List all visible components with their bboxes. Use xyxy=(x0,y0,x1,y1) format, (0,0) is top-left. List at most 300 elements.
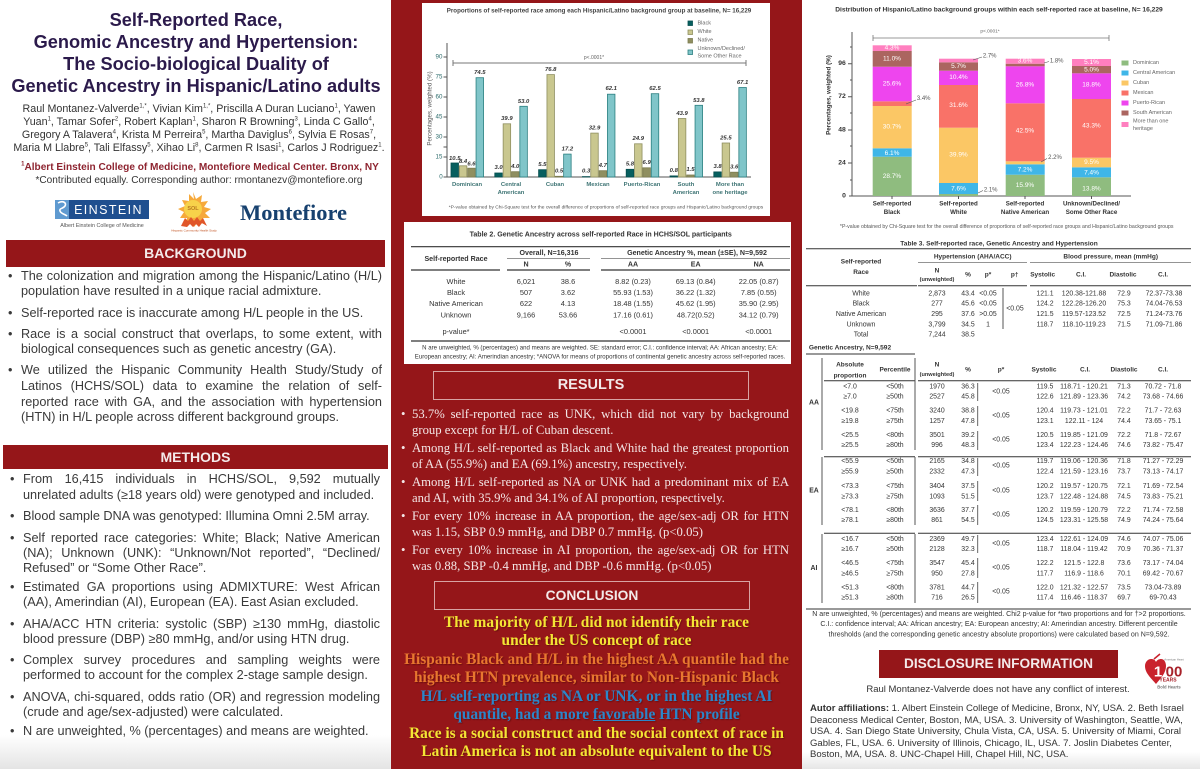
institution: 1Albert Einstein College of Medicine, Montefiore Medical Center. Bronx, NY xyxy=(21,162,379,173)
bullet list: background: reported race with GA, and the association with hypertension xyxy=(21,395,382,409)
logo: SOL sun: SOL xyxy=(187,206,199,212)
disclosure heading xyxy=(879,650,1118,678)
rows: AI: ≥75th xyxy=(886,570,904,578)
legend: Dominican xyxy=(1133,60,1159,66)
bullet list: results: 53.7% self-reported race as UNK, which did not vary by background xyxy=(412,407,789,421)
bullet list: results: was 0.88, SBP -0.4 mmHg, and DBP -0.6 mmHg. (p<0.05) xyxy=(412,559,711,573)
rows: AA: 74.4 xyxy=(1117,418,1131,425)
rows: self-reported race: 75.3 xyxy=(1117,300,1131,308)
logo: American Heart 100 years: YEARS xyxy=(1159,678,1177,684)
rows: EA: 74.9 xyxy=(1117,517,1131,524)
bars: Mexican xyxy=(582,86,617,177)
bars: More than one heritage xyxy=(713,80,748,177)
rows: AI: 73.6 xyxy=(1117,560,1131,567)
author affiliations: Autor affiliations: 1. Albert Einstein College of Medicine, Bronx, NY, USA. 2. Beth Israel xyxy=(810,703,1184,714)
bullet list: methods: Self reported race categories: White; Black; Native American xyxy=(23,531,380,545)
bars: Cuban: 76.8 xyxy=(545,67,557,73)
bars: Dominican: 74.5 xyxy=(474,70,486,76)
row: Black: 507 xyxy=(520,288,532,297)
rows: EA: <0.05 xyxy=(992,488,1010,494)
rows: EA: 3636 xyxy=(929,507,945,514)
bullet list: background: Latinos (HCHS/SOL) data to examine the relation of self- xyxy=(21,379,382,393)
legend: Black xyxy=(698,20,711,26)
row: Black: 36.22 (1.32) xyxy=(676,288,716,297)
table 3 footnote: N are unweighted, % (percentages) and means are weighted. Chi2 p-value for *two proportions and for †>2 proportions. xyxy=(812,611,1186,618)
table 2 header xyxy=(424,249,767,268)
rows: EA: ≥73.3 xyxy=(841,494,859,500)
heading: methods: METHODS xyxy=(160,449,230,465)
rows: AA: 72.2 xyxy=(1117,408,1131,414)
legend: Mexican xyxy=(1133,90,1153,96)
rows: AI: 116.9 - 118.6 xyxy=(1064,570,1104,578)
bars: Cuban: 0.5 xyxy=(555,168,564,174)
legend: heritage xyxy=(1133,126,1153,132)
rows: AI: <46.5 xyxy=(841,560,859,567)
rows: AI: 950 xyxy=(931,570,943,578)
rows: AA: 1257 xyxy=(929,418,945,425)
callouts: 1.8% xyxy=(1050,59,1064,65)
rows: AA: 2527 xyxy=(929,394,945,400)
rows: AI xyxy=(811,536,1183,602)
table 2 header: % xyxy=(565,260,572,268)
chart: self-reported race by background group: p<.0001* xyxy=(584,55,604,61)
rows: EA: 2165 xyxy=(929,458,945,465)
bars: South American: 0.8 xyxy=(670,168,679,174)
rows: self-reported race: 71.09-71.86 xyxy=(1146,322,1183,328)
bullet list: results: • xyxy=(401,441,405,455)
table 3 header: Diastolic xyxy=(1109,272,1137,278)
rows: AI: 44.7 xyxy=(961,584,975,592)
legend xyxy=(688,20,745,60)
table 2 header: Self-reported Race xyxy=(424,255,488,263)
axes xyxy=(848,32,1131,199)
table 2 header: Genetic Ancestry %, mean (±SE), N=9,592 xyxy=(627,249,767,257)
table 3 title: Table 3. Self-reported race, Genetic Ancestry and Hypertension xyxy=(900,240,1098,248)
rows: AI: 117.7 xyxy=(1037,570,1054,578)
rows: EA: 71.27 - 72.29 xyxy=(1143,458,1183,465)
rows: AA: 71.7 - 72.63 xyxy=(1145,408,1182,414)
logo: American Heart 100 years: 00 xyxy=(1166,664,1182,680)
stacked bar: Self-reported Native American xyxy=(1006,58,1045,196)
bars: Cuban: 5.5 xyxy=(538,162,547,168)
rows: EA: 73.13 - 74.17 xyxy=(1143,468,1183,476)
callouts: 3.4% xyxy=(917,96,931,102)
bullet list: results: and AI, with 35.9% and 34.1% of AI proportion, respectively. xyxy=(412,491,725,505)
row: p-value: <0.0001 xyxy=(682,327,709,336)
bars: Mexican: 62.1 xyxy=(605,86,617,92)
rows: EA: 123.7 xyxy=(1036,494,1054,500)
heading: background: BACKGROUND xyxy=(144,245,247,261)
rows: AA: <50th xyxy=(886,384,904,390)
bullet list: methods: • xyxy=(10,653,14,667)
table 3 header: Blood pressure, mean (mmHg) xyxy=(1063,254,1158,260)
rows: self-reported race: 118.7 xyxy=(1037,322,1054,328)
category labels: Self-reported xyxy=(1006,200,1044,208)
bars: South American xyxy=(670,98,705,177)
row: Native American: 35.90 (2.95) xyxy=(739,299,779,308)
bars: Central American: 4.0 xyxy=(510,164,520,170)
bullet list: background: • xyxy=(8,363,12,377)
table 2 footnote: N are unweighted, % (percentages) and means are weighted. SE: standard error; C.I.: confidence interval; AA: African ancestry; EA: xyxy=(422,344,778,352)
rows: self-reported race: 74.04-76.53 xyxy=(1146,300,1183,308)
table 3 xyxy=(806,240,1191,638)
bars: South American: 43.9 xyxy=(675,111,689,117)
rows: AA: ≥19.8 xyxy=(841,418,859,425)
corresponding author: *Contributed equally. Corresponding author: rmontanezv@montefiore.org xyxy=(35,175,363,186)
rows: EA: 37.5 xyxy=(961,483,975,490)
rows: AA: <0.05 xyxy=(992,436,1010,444)
legend: White xyxy=(698,29,712,35)
genetic ancestry header xyxy=(834,362,1168,380)
stacked bar: Self-reported Black: 25.6% xyxy=(883,80,901,88)
authors: Yuan1, Tamar Sofer2, Robert Kaplan1, Sharon R Browning3, Linda C Gallo4, xyxy=(23,116,375,128)
y axis labels: 72 xyxy=(838,93,846,100)
authors: Raul Montanez-Valverde1,*, Vivian Kim1,*, Priscilla A Duran Luciano1, Yawen xyxy=(23,103,375,115)
rows: AI: ≥46.5 xyxy=(841,570,859,578)
stacked bar: Self-reported Black: 30.7% xyxy=(883,124,901,130)
table 3 rules xyxy=(806,249,1191,609)
bars: South American: 1.5 xyxy=(686,167,695,173)
rows: EA: <0.05 xyxy=(992,462,1010,470)
rows: AA: 36.3 xyxy=(961,384,975,390)
title: Self-Reported Race, xyxy=(110,10,282,30)
chart footnote: *P-value obtained by Chi-Square test for the overall difference of proportions of self-reported race groups and Hispanic/Latino background groups xyxy=(449,204,764,210)
table 2 xyxy=(411,232,790,360)
legend: South American xyxy=(1133,110,1172,116)
table 3 header: p† xyxy=(1011,272,1019,278)
rows: AA: 73.68 - 74.66 xyxy=(1143,394,1183,400)
bullet list: results: Among H/L self-reported as Black and White had the greatest proportion xyxy=(412,441,789,455)
legend: Cuban xyxy=(1133,80,1149,86)
bars: More than one heritage: 3.6 xyxy=(730,164,739,170)
bars: More than one heritage: 25.5 xyxy=(719,136,732,142)
heading: results xyxy=(433,371,749,400)
rows: EA: 123.31 - 125.58 xyxy=(1060,517,1108,524)
bullet list: background: • xyxy=(8,327,12,341)
table 3 header: C.I. xyxy=(1158,272,1168,278)
bars: Central American: 39.9 xyxy=(501,116,513,122)
conclusion statement 3 xyxy=(420,688,773,724)
logo: Montefiore: Montefiore xyxy=(240,200,347,225)
table 2 header: N xyxy=(523,260,529,268)
rows: AI: <50th xyxy=(886,536,904,543)
rows: EA: 124.5 xyxy=(1036,517,1054,524)
bullet list: methods: (NA); Unknown (UNK): “Unknown/Not reported”, “Declined/ xyxy=(23,546,380,560)
table 3 header xyxy=(841,254,1168,283)
rows: self-reported race: <0.05 xyxy=(1006,306,1024,312)
rows: EA: 54.5 xyxy=(961,517,975,524)
rows: AI: ≥51.3 xyxy=(841,594,859,602)
conclusion statement 4: Race is a social construct and the social context of race in xyxy=(409,725,784,742)
rows: self-reported race: <0.05 xyxy=(979,290,997,298)
rows: AI: 73.04-73.89 xyxy=(1145,584,1182,592)
rows: self-reported race: 43.4 xyxy=(961,290,975,298)
rows: AA: 45.8 xyxy=(961,394,975,400)
rows: EA: 119.7 xyxy=(1037,458,1054,465)
bars: Dominican: 10.5 xyxy=(449,156,461,162)
rows: EA: ≥80th xyxy=(886,517,904,524)
rows: AA: <19.8 xyxy=(841,408,859,414)
chart: background groups within race xyxy=(826,6,1175,230)
rows: AI: 117.4 xyxy=(1037,594,1054,602)
stacked bar: Self-reported Black xyxy=(873,44,912,196)
rows: self-reported race: 124.2 xyxy=(1036,300,1054,308)
rows: AA: 1970 xyxy=(929,384,945,390)
conclusion statement 3: quantile, had a more favorable HTN profile xyxy=(453,706,740,723)
bullet list: background: Race is a social construct that overlaps, to some extent, with xyxy=(21,327,382,341)
category labels: Self-reported xyxy=(939,200,978,208)
logo: American Heart 100 years: American Heart xyxy=(1164,658,1184,662)
bars: Dominican: 6.6 xyxy=(467,162,476,168)
rows: AA: <25.5 xyxy=(841,432,859,439)
rows: AA: 118.71 - 120.21 xyxy=(1060,384,1108,390)
logo: American Heart 100 years: Bold Hearts xyxy=(1157,684,1181,690)
bullet list: background: population have resulted in a unique racial admixture. xyxy=(21,284,321,298)
rows: AA: 120.4 xyxy=(1036,408,1054,414)
legend xyxy=(1122,60,1175,132)
rows: AI: 69.42 - 70.67 xyxy=(1143,570,1183,578)
title: Genomic Ancestry and Hypertension: xyxy=(34,32,358,52)
rows: EA: 1093 xyxy=(929,494,945,500)
stacked bar: Self-reported Black: 11.0% xyxy=(883,56,901,62)
rows: EA: ≥75th xyxy=(886,494,904,500)
rows: self-reported race: >0.05 xyxy=(979,311,997,318)
rows: AI: 116.46 - 118.37 xyxy=(1060,594,1108,602)
legend: Unknown/Declined/ xyxy=(698,46,745,52)
author affiliations: USA. 4. San Diego State University, Chula Vista, CA, USA. 5. University of Miami, Coral xyxy=(810,726,1181,737)
rows: AI: <0.05 xyxy=(992,588,1010,596)
legend: Puerto-Rican xyxy=(1133,100,1165,106)
y axis labels: Percentages, weighted (%) xyxy=(826,55,832,135)
rows: self-reported race: 121.1 xyxy=(1036,290,1054,298)
rows: EA: 122.4 xyxy=(1036,468,1054,476)
bars: Puerto-Rican: 5.8 xyxy=(626,162,635,168)
genetic ancestry header: Absolute xyxy=(836,362,864,368)
row: Unknown xyxy=(441,310,779,320)
rows: AI: 69.7 xyxy=(1117,594,1131,602)
bullet list: methods: Complex survey procedures and sampling weights were xyxy=(23,653,380,667)
stacked bar: Unknown/Declined/Some Other Race: 13.8% xyxy=(1082,186,1101,192)
table 3 header: N xyxy=(935,268,940,274)
rows: EA: 122.48 - 124.88 xyxy=(1060,494,1108,500)
authors: Maria M Llabre5, Tali Elfassy5, Xihao Li8, Carmen R Isasi1, Carlos J Rodriguez1. xyxy=(13,142,385,154)
chart footnote: *P-value obtained by Chi-Square test for the overall difference of proportions of self-reported race groups and Hispanic/Latino background groups xyxy=(840,224,1174,230)
table 3 footnote xyxy=(812,611,1186,638)
rows: self-reported race: 71.24-73.76 xyxy=(1146,311,1183,318)
rows: EA: 120.2 xyxy=(1036,507,1054,514)
bullet list: results: of AA (55.9%) and EA (69.1%) ancestry, respectively. xyxy=(412,457,687,471)
bullet list: methods: ANOVA, chi-squared, odds ratio (OR) and regression modeling xyxy=(23,690,380,704)
row: Black: 7.85 (0.55) xyxy=(741,288,777,297)
y axis labels: 48 xyxy=(838,126,846,134)
rows: EA: ≥55.9 xyxy=(841,468,859,476)
category labels xyxy=(452,182,748,196)
rows: EA: 73.83 - 75.21 xyxy=(1143,494,1183,500)
rows: self-reported race: <0.05 xyxy=(979,300,997,308)
rows: AA: 119.5 xyxy=(1037,384,1054,390)
y axis labels: 15 xyxy=(436,154,443,160)
bars: Mexican: 4.7 xyxy=(598,163,608,169)
bars: South American: 53.8 xyxy=(693,98,705,104)
y axis labels: 30 xyxy=(436,134,443,140)
logo: SOL sun xyxy=(171,192,217,232)
row: Black: Black xyxy=(447,288,465,297)
rows: AA: 3240 xyxy=(929,408,945,414)
table 3 header: Hypertension (AHA/ACC) xyxy=(934,254,1012,260)
bullet list: methods: AHA/ACC HTN criteria: systolic (SBP) ≥130 mmHg, diastolic xyxy=(23,617,380,631)
logo: Einstein: Albert Einstein College of Medicine xyxy=(60,223,144,229)
y axis labels: 96 xyxy=(838,60,846,67)
rows: EA: 861 xyxy=(931,517,943,524)
row: Native American: 622 xyxy=(520,299,532,308)
table 2 footnote xyxy=(415,344,786,360)
rows: AA: 48.3 xyxy=(961,442,975,449)
row: White xyxy=(447,277,779,286)
logo: American Heart 100 years: 1 xyxy=(1154,664,1162,680)
genetic ancestry header: % xyxy=(965,366,971,374)
rows: self-reported race: 34.5 xyxy=(961,322,975,328)
rows: AA: 122.11 - 124 xyxy=(1065,418,1103,425)
rows: AA: 72.2 xyxy=(1117,432,1131,439)
row: Unknown: 48.72(0.52) xyxy=(677,310,715,320)
bullet list: methods xyxy=(10,472,380,738)
bullet list: background: • xyxy=(8,306,12,320)
genetic ancestry header: p* xyxy=(998,366,1005,374)
stacked bar: Self-reported Native American: 7.2% xyxy=(1018,166,1033,174)
row: Black: 55.93 (1.53) xyxy=(613,288,653,297)
rows: EA: 74.24 - 75.64 xyxy=(1143,517,1183,524)
logo: Einstein: EINSTEIN xyxy=(74,203,143,217)
rows: self-reported race: 1 xyxy=(986,322,990,328)
bullet list: background: Self-reported race is inaccurate among H/L people in the US. xyxy=(21,306,363,320)
table 3 header: Self-reported xyxy=(841,258,881,266)
conclusion statement 1 xyxy=(444,614,750,650)
bullet list: methods: • xyxy=(10,724,14,738)
rows: AA: 122.6 xyxy=(1036,394,1054,400)
category labels: More than xyxy=(716,182,744,188)
conclusion statement 2 xyxy=(404,651,790,687)
genetic ancestry header: C.I. xyxy=(1158,366,1168,374)
rows: EA: 72.1 xyxy=(1117,483,1131,490)
rows: self-reported race: Native American xyxy=(836,311,886,318)
rows: EA: 71.69 - 72.54 xyxy=(1143,483,1183,490)
y axis labels: 0 xyxy=(842,192,846,200)
y axis labels: 60 xyxy=(436,94,443,100)
rows: EA: 72.2 xyxy=(1117,507,1131,514)
stacked bar: Unknown/Declined/Some Other Race: 5.1% xyxy=(1084,59,1099,66)
bars: Central American xyxy=(494,99,530,177)
rows: AA: 71.3 xyxy=(1117,384,1131,390)
rows: EA: 71.8 xyxy=(1117,458,1131,465)
rows: AA: 996 xyxy=(931,442,943,449)
rows: AI: 2128 xyxy=(929,546,945,553)
rows: self-reported race: Total xyxy=(854,332,869,338)
bullet list: background: biological consequences such as genetic ancestry (GA). xyxy=(21,342,336,356)
category labels: White xyxy=(950,209,967,216)
bullet list: background: • xyxy=(8,269,12,283)
row: p-value: p-value* xyxy=(442,327,470,336)
author affiliations: Gables, FL, USA. 6. University of Illinois, Chicago, IL, USA. 7. Joslin Diabetes Center, xyxy=(810,738,1172,748)
rows: AA: 121.89 - 123.36 xyxy=(1060,394,1108,400)
rows: EA: 74.5 xyxy=(1117,494,1131,500)
bars: Dominican xyxy=(449,70,486,177)
rows: EA xyxy=(809,458,1183,524)
chart title: Distribution of Hispanic/Latino background groups within each self-reported race at baseline, N= 16,229 xyxy=(835,6,1163,14)
rows: AI: 121.5 - 122.8 xyxy=(1064,560,1104,567)
rows: self-reported race xyxy=(836,290,1183,338)
rows: AI: 69-70.43 xyxy=(1149,594,1177,602)
rows: EA: <75th xyxy=(886,483,904,490)
conclusion statement 4: Latin America is not an absolute equivalent to the US xyxy=(421,743,772,760)
logo: SOL sun: Hispanic Community Health Study xyxy=(171,228,217,232)
conclusion statement 1: The majority of H/L did not identify their race xyxy=(444,614,749,631)
rows: AI: <16.7 xyxy=(841,536,859,543)
row: Black xyxy=(447,288,777,297)
rows: AI: ≥80th xyxy=(886,594,904,602)
rows: AI: 74.07 - 75.06 xyxy=(1143,536,1183,543)
bullet list: background: The colonization and migration among the Hispanic/Latino (H/L) xyxy=(21,269,382,283)
table 3 header: % xyxy=(965,272,971,278)
callouts: 2.7% xyxy=(983,54,997,60)
callouts: 2.1% xyxy=(984,188,998,194)
rows: AI: AI xyxy=(811,565,818,572)
author affiliations: Deaconess Medical Center, Boston, MA, USA. 3. University of Washington, Seattle, WA, xyxy=(810,714,1183,726)
bullet list: results: • xyxy=(401,543,405,557)
rows: self-reported race: 72.9 xyxy=(1117,290,1131,298)
rows: AA: <80th xyxy=(886,432,904,439)
bullet list: methods: • xyxy=(10,690,14,704)
stacked bar: Unknown/Declined/Some Other Race: 5.0% xyxy=(1084,66,1099,74)
bullet list: methods: N are unweighted, % (percentages) and means are weighted. xyxy=(23,724,369,738)
stacked bar: Self-reported White: 39.9% xyxy=(949,152,968,158)
rows: AI: 26.5 xyxy=(961,594,975,602)
panel: conclusion xyxy=(404,581,790,761)
rows: self-reported race: 37.6 xyxy=(961,311,975,318)
rows: EA: 51.5 xyxy=(961,494,975,500)
rows: AI: 123.4 xyxy=(1036,536,1054,543)
y axis labels: 45 xyxy=(436,114,443,120)
row: Native American: 45.62 (1.95) xyxy=(676,299,716,308)
stacked bar: Unknown/Declined/Some Other Race: 43.3% xyxy=(1082,122,1101,130)
rows: self-reported race: 121.5 xyxy=(1036,311,1054,318)
stacked bar: Unknown/Declined/Some Other Race: 18.8% xyxy=(1082,82,1101,88)
authors: Gregory A Talavera4, Krista M Perreira5, Martha Daviglus6, Sylvia E Rosas7, xyxy=(22,129,376,141)
category labels: South xyxy=(678,182,695,188)
rows: AI: 716 xyxy=(931,594,943,602)
rows: AA: 47.8 xyxy=(961,418,975,425)
author affiliations xyxy=(810,703,1184,760)
rows: EA: 47.3 xyxy=(961,468,975,476)
authors xyxy=(13,103,385,154)
row: White: 69.13 (0.84) xyxy=(676,277,716,286)
bars: Dominican: 8.4 xyxy=(459,159,468,165)
disclosure heading: DISCLOSURE INFORMATION xyxy=(904,656,1093,671)
genetic ancestry header: C.I. xyxy=(1080,366,1090,374)
stacked bar: Self-reported Black: 4.3% xyxy=(885,44,900,52)
rows: AI: 49.7 xyxy=(961,536,975,543)
bars: Puerto-Rican: 62.5 xyxy=(649,86,661,92)
table 2 rules xyxy=(411,247,790,341)
table 3 header: (unweighted) xyxy=(920,277,955,283)
rows: AI: 74.6 xyxy=(1117,536,1131,543)
genetic ancestry header: Systolic xyxy=(1032,366,1057,374)
rows: EA: 71.74 - 72.58 xyxy=(1143,507,1183,514)
row: Native American xyxy=(429,299,779,308)
conclusion statement 1: under the US concept of race xyxy=(502,632,691,649)
rows: self-reported race: 295 xyxy=(931,311,943,318)
rows: self-reported race: 72.5 xyxy=(1117,311,1131,318)
y axis labels: 24 xyxy=(838,160,846,166)
